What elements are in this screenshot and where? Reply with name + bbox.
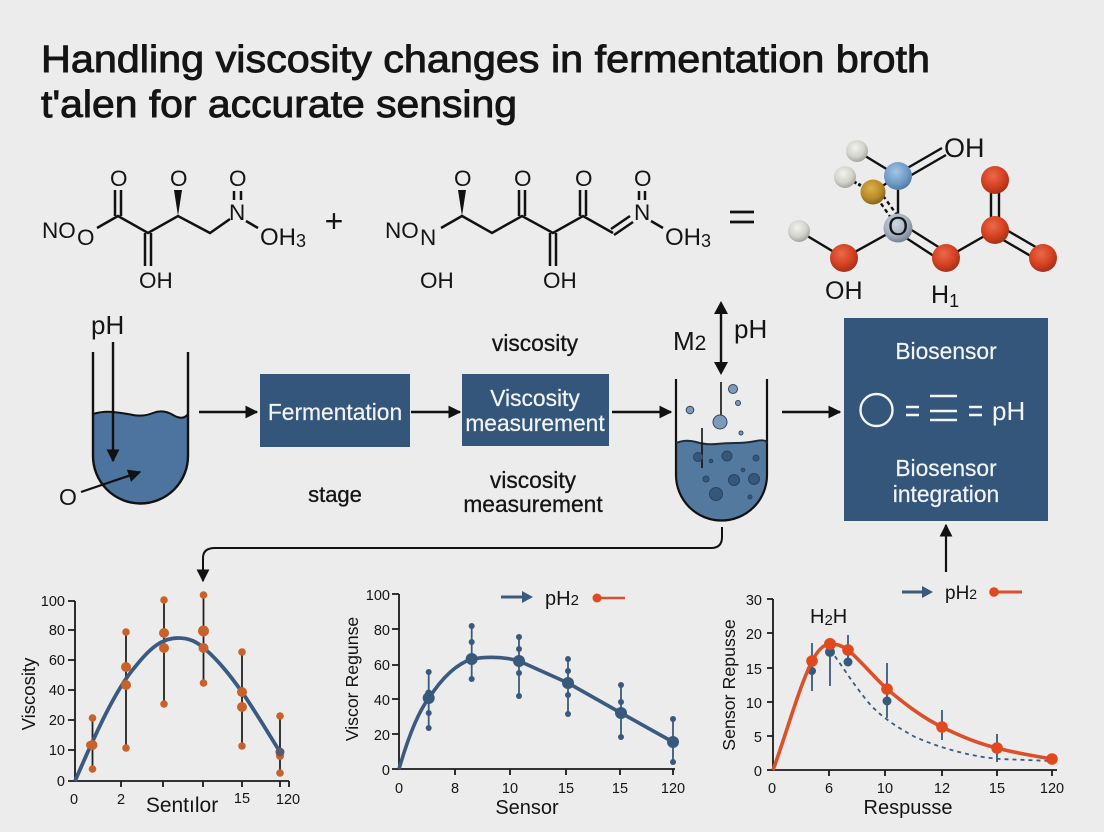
chart: viscor regunse vs sensor: 0 — [395, 781, 403, 797]
chart: viscor regunse vs sensor: 100 — [366, 588, 390, 604]
molecule: 3D ball and stick: OH — [825, 277, 862, 305]
molecule: 3D ball and stick: 1 — [949, 291, 959, 311]
molecule: middle skeletal formula: N — [420, 225, 436, 250]
chart: viscosity vs sentilor: 40 — [49, 683, 65, 699]
legend: middle chart: pH2 — [545, 588, 579, 610]
box: viscosity measurement — [462, 374, 609, 446]
chart: viscor regunse vs sensor: 0 — [382, 763, 390, 779]
molecule: middle skeletal formula: 3 — [701, 231, 711, 251]
chart: viscosity vs sentilor: 10 — [49, 743, 65, 759]
chart: sensor repuse vs respusse: H — [810, 606, 824, 628]
molecule: 3D ball and stick: OH — [944, 133, 984, 163]
legend: right chart: pH2 — [945, 583, 977, 604]
chart: sensor repuse vs respusse: 0 — [768, 781, 776, 797]
chart: viscosity vs sentilor: Sentılor — [146, 794, 218, 817]
chart: sensor repuse vs respusse: 30 — [746, 593, 762, 609]
molecule: left skeletal formula: NO — [42, 218, 76, 243]
box: viscosity measurement: measurement — [465, 410, 605, 436]
chart: sensor repuse vs respusse: 10 — [746, 696, 762, 712]
title: Handling viscosity changes in fermentation broth — [41, 39, 930, 81]
chart: viscor regunse vs sensor: 8 — [451, 781, 459, 797]
molecule: left skeletal formula: OH — [139, 268, 173, 293]
box: biosensor integration: Biosensor — [895, 455, 997, 481]
chart: sensor repuse vs respusse: 12 — [934, 781, 950, 797]
label: stage: stage — [308, 482, 362, 507]
chart: viscor regunse vs sensor: 80 — [374, 623, 390, 639]
legend: right chart — [902, 583, 1022, 604]
molecule: left skeletal formula — [42, 166, 306, 293]
chart: viscor regunse vs sensor: 120 — [661, 781, 685, 797]
chart: viscosity vs sentilor: Viscosity — [18, 657, 39, 730]
chart: sensor repuse vs respusse: H — [833, 606, 847, 628]
chart: viscor regunse vs sensor: Sensor — [495, 797, 559, 819]
molecule: left skeletal formula: N — [229, 200, 245, 225]
molecule: left skeletal formula: 3 — [296, 231, 306, 251]
vessel: fermentation tank — [59, 310, 188, 510]
chart: viscosity vs sentilor: 100 — [41, 594, 65, 610]
box: viscosity measurement: Viscosity — [490, 385, 580, 411]
molecule: middle skeletal formula: O — [634, 166, 652, 191]
chart: viscor regunse vs sensor: 15 — [612, 781, 628, 797]
chart: viscor regunse vs sensor: 60 — [374, 658, 390, 674]
box: biosensor integration: integration — [893, 481, 999, 507]
arrow: connector from vessel to first chart — [203, 527, 722, 581]
label: viscosity: viscosity — [492, 330, 579, 356]
chart: viscosity vs sentilor: 80 — [49, 623, 65, 639]
chart: viscosity vs sentilor: 20 — [49, 713, 65, 729]
box: biosensor integration — [844, 318, 1048, 521]
title — [41, 39, 930, 126]
molecule: middle skeletal formula: N — [634, 200, 650, 225]
chart: viscor regunse vs sensor: 15 — [558, 781, 574, 797]
chart: viscor regunse vs sensor: 10 — [502, 781, 518, 797]
box: biosensor integration: pH — [992, 396, 1025, 426]
molecule: left skeletal formula: O — [110, 166, 128, 191]
chart: viscosity vs sentilor: 0 — [70, 792, 78, 808]
chart: viscor regunse vs sensor — [342, 588, 685, 819]
arrow: sensing vessel to biosensor — [782, 411, 840, 413]
chart: sensor repuse vs respusse: 0 — [754, 764, 762, 780]
vessel: fermentation tank: O — [59, 484, 77, 510]
molecule: middle skeletal formula: O — [514, 166, 532, 191]
legend: middle chart — [501, 588, 625, 610]
box: fermentation: Fermentation — [268, 399, 402, 425]
chart: viscor regunse vs sensor: 40 — [374, 693, 390, 709]
chart: viscosity vs sentilor — [18, 591, 300, 817]
molecule: left skeletal formula: OH — [260, 224, 296, 251]
label: viscosity measurement: viscosity — [490, 467, 577, 493]
molecule: left skeletal formula: O — [229, 166, 247, 191]
molecule: middle skeletal formula: OH — [420, 268, 454, 293]
chart: viscosity vs sentilor: 15 — [234, 791, 250, 807]
label: viscosity measurement: measurement — [463, 491, 603, 517]
arrow: up to biosensor — [945, 525, 947, 572]
vessel: fermentation tank: pH — [91, 310, 124, 340]
chart: sensor repuse vs respusse: 6 — [825, 781, 833, 797]
chart: sensor repuse vs respusse: 15 — [746, 662, 762, 678]
label: pH: pH — [734, 314, 767, 344]
molecule: middle skeletal formula: O — [454, 166, 472, 191]
chart: sensor repuse vs respusse: 5 — [754, 730, 762, 746]
arrow: fermentation to viscosity measurement — [411, 411, 460, 413]
label: viscosity measurement — [463, 467, 603, 517]
arrow: tank to fermentation — [199, 411, 257, 413]
molecule: middle skeletal formula: OH — [543, 268, 577, 293]
molecule: 3D ball and stick: O — [888, 211, 908, 241]
vessel: sensing vessel with bubbles — [676, 379, 767, 520]
title: t'alen for accurate sensing — [41, 84, 517, 126]
chart: sensor repuse vs respusse: 20 — [746, 627, 762, 643]
molecule: middle skeletal formula: OH — [665, 224, 701, 251]
box: biosensor integration: Biosensor — [895, 338, 997, 364]
chart: viscosity vs sentilor: 2 — [117, 792, 125, 808]
chart: viscosity vs sentilor: 120 — [276, 792, 300, 808]
molecule: middle skeletal formula: NO — [385, 218, 419, 243]
chart: sensor repuse vs respusse: Sensor Repusse — [719, 619, 739, 751]
operator: plus: + — [325, 203, 343, 239]
chart: viscor regunse vs sensor: 20 — [374, 728, 390, 744]
chart: viscosity vs sentilor: 60 — [49, 653, 65, 669]
chart: viscor regunse vs sensor: Viscor Regunse — [342, 617, 362, 741]
molecule: left skeletal formula: O — [170, 166, 188, 191]
chart: sensor repuse vs respusse: 15 — [989, 781, 1005, 797]
chart: sensor repuse vs respusse — [719, 593, 1064, 819]
operator: equals — [730, 212, 754, 222]
molecule: 3D ball and stick — [788, 133, 1057, 311]
molecule: left skeletal formula: O — [77, 225, 95, 250]
chart: sensor repuse vs respusse: 2 — [824, 612, 833, 629]
box: fermentation — [260, 374, 410, 447]
label: M2: M2 — [673, 326, 706, 356]
chart: sensor repuse vs respusse: 120 — [1040, 781, 1064, 797]
molecule: middle skeletal formula: O — [575, 166, 593, 191]
molecule: 3D ball and stick: H — [931, 281, 949, 309]
chart: sensor repuse vs respusse: Respusse — [864, 797, 952, 819]
arrow: measurement to sensor vessel — [612, 411, 671, 413]
chart: viscosity vs sentilor: 0 — [57, 774, 65, 790]
molecule: middle skeletal formula — [385, 166, 711, 293]
arrow: double headed probe — [714, 301, 728, 375]
chart: sensor repuse vs respusse: 10 — [877, 781, 893, 797]
